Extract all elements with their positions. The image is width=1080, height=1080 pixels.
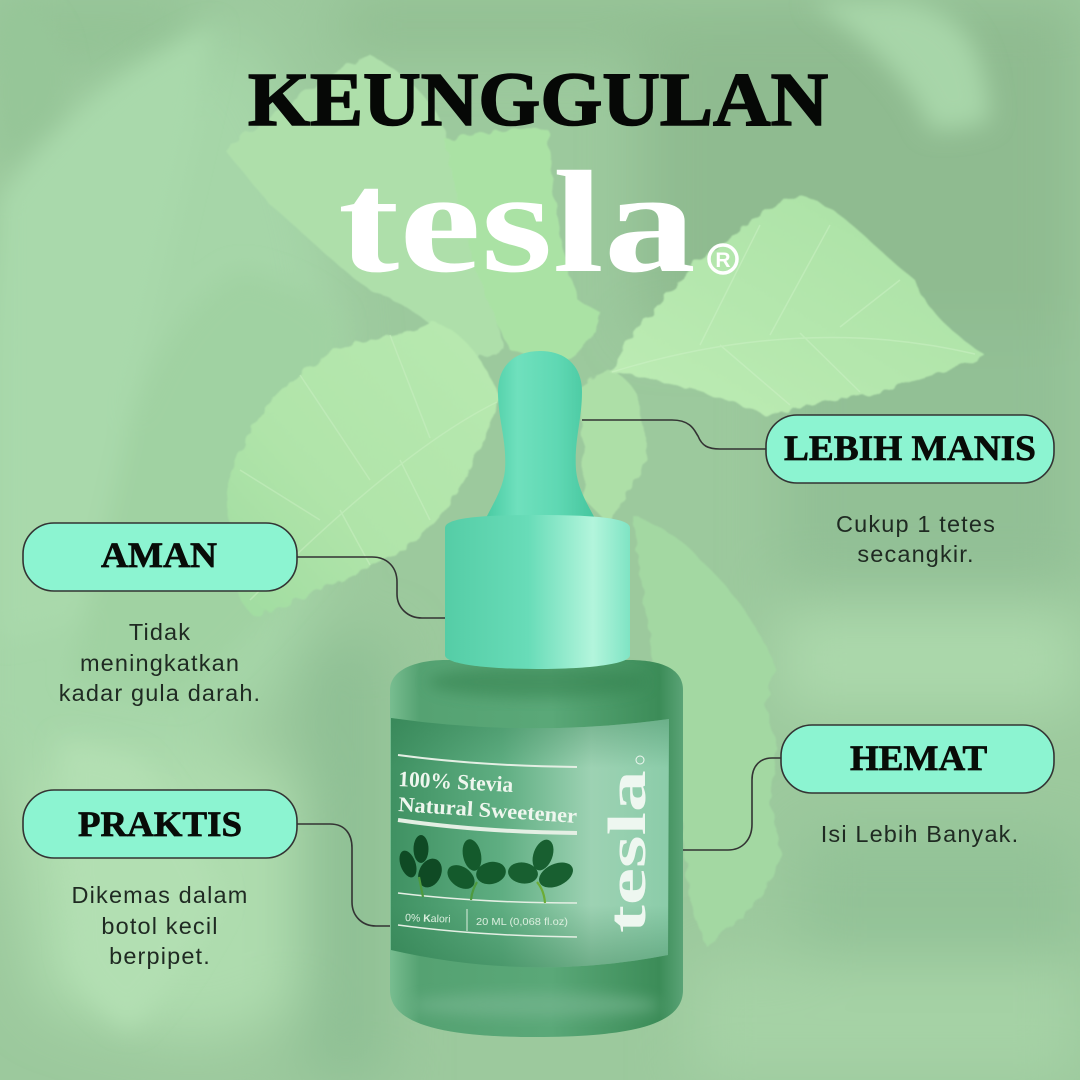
brand logo: R: [715, 249, 731, 272]
label leaves: [396, 835, 577, 903]
label rules: [398, 755, 577, 937]
label heading: Natural Sweetener: [398, 793, 578, 828]
label footer: 0% Kalori: [405, 912, 451, 926]
label heading: [398, 767, 578, 828]
pill label: PRAKTIS: [78, 804, 242, 844]
product: dropper bottle: [390, 351, 683, 1037]
pill: [23, 523, 297, 591]
bottle glass body: [390, 660, 683, 1037]
text: aman description: meningkatkan: [80, 650, 240, 676]
label heading: 100% Stevia: [398, 767, 514, 797]
pill: [781, 725, 1054, 793]
dropper teat: [483, 351, 598, 524]
text: lebih manis description: Cukup 1 tetes: [836, 511, 996, 537]
callout: hemat: [781, 725, 1054, 793]
text: praktis description: Dikemas dalam: [72, 882, 248, 908]
text: lebih manis description: secangkir.: [857, 541, 975, 567]
pill: [766, 415, 1054, 483]
label: [391, 718, 669, 967]
leaf: small centre right: [580, 370, 648, 525]
text: praktis description: berpipet.: [109, 943, 211, 969]
text: hemat description: Isi Lebih Banyak.: [821, 821, 1019, 847]
pill label: HEMAT: [850, 737, 987, 778]
brand logo: tesla: [338, 141, 696, 303]
dropper collar: [445, 515, 630, 669]
connector: praktis: [297, 824, 392, 926]
title: KEUNGGULAN: [248, 58, 828, 142]
text: aman description: Tidak: [129, 619, 191, 645]
pill label: LEBIH MANIS: [784, 428, 1036, 468]
leaf: right: [610, 195, 985, 415]
text: praktis description: botol kecil: [101, 913, 219, 939]
connector: hemat: [682, 758, 781, 850]
callout: aman: [23, 523, 297, 591]
leaf: top centre background leaves: [225, 55, 600, 365]
pill: [23, 790, 297, 858]
label footer: 20 ML (0,068 fl.oz): [476, 916, 568, 928]
callout: lebih manis: [766, 415, 1054, 483]
leaf: left front: [226, 322, 500, 617]
connector: aman: [297, 557, 446, 618]
label footer: [405, 909, 568, 931]
label vertical logo: tesla: [597, 770, 657, 933]
pill label: AMAN: [101, 535, 217, 575]
connector: lebih manis: [582, 420, 766, 449]
leaf: lower right behind bottle: [632, 515, 782, 945]
text: aman description: kadar gula darah.: [59, 680, 261, 706]
callout: praktis: [23, 790, 297, 858]
